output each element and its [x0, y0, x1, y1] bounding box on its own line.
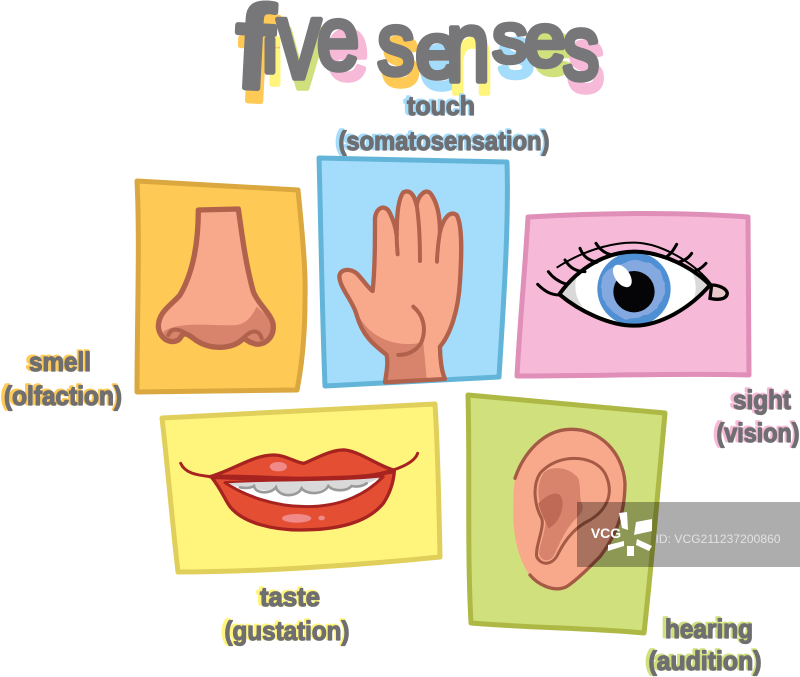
title: s — [568, 8, 604, 111]
label: sight — [714, 384, 800, 448]
title: e — [415, 6, 459, 94]
title: e — [532, 7, 574, 90]
label: sight: sight — [730, 384, 790, 414]
label: smell: smell — [29, 347, 91, 377]
watermark: VCG — [591, 525, 621, 541]
panel: taste — [162, 404, 440, 572]
label: taste: (gustation) — [222, 615, 348, 645]
title: s — [382, 6, 420, 104]
watermark: ID: VCG211237200860 — [656, 532, 781, 546]
label: smell — [1, 346, 122, 411]
icon: hand — [339, 191, 461, 382]
panel: smell — [137, 181, 305, 392]
label: smell: (olfaction) — [4, 381, 122, 411]
panel: touch — [319, 158, 507, 386]
icon: ear — [513, 429, 625, 589]
title: i — [263, 17, 277, 86]
title: s — [492, 0, 528, 77]
icon: lips — [181, 450, 418, 530]
icon: eye — [538, 243, 727, 326]
watermark — [577, 502, 800, 567]
label: taste: (gustation) — [224, 616, 350, 646]
label: smell: (olfaction) — [1, 380, 121, 410]
label: hearing — [646, 613, 762, 676]
label: smell: smell — [26, 346, 90, 376]
icon: nose — [158, 209, 273, 347]
label: taste — [222, 581, 350, 646]
panel: hearing — [468, 395, 665, 633]
title: e — [419, 17, 463, 105]
title: i — [268, 29, 282, 98]
label: touch: (somatosensation) — [338, 126, 550, 156]
icon: watermark burst — [608, 512, 652, 556]
label: taste: taste — [257, 581, 319, 611]
title — [232, 0, 604, 127]
label: touch: touch — [407, 91, 475, 121]
label: hearing: hearing — [665, 614, 753, 644]
label: touch: touch — [404, 90, 474, 120]
title: e — [326, 0, 368, 98]
title: s — [498, 14, 534, 92]
label: sight: sight — [733, 385, 791, 415]
title: e — [524, 0, 566, 82]
label: hearing: (audition) — [646, 645, 760, 675]
label: taste: taste — [260, 582, 320, 612]
label: touch: (somatosensation) — [336, 125, 548, 155]
panel: sight — [517, 214, 749, 376]
label: hearing: hearing — [662, 613, 752, 643]
label: touch — [336, 90, 550, 156]
label: hearing: (audition) — [648, 646, 762, 676]
title: n — [449, 4, 493, 115]
